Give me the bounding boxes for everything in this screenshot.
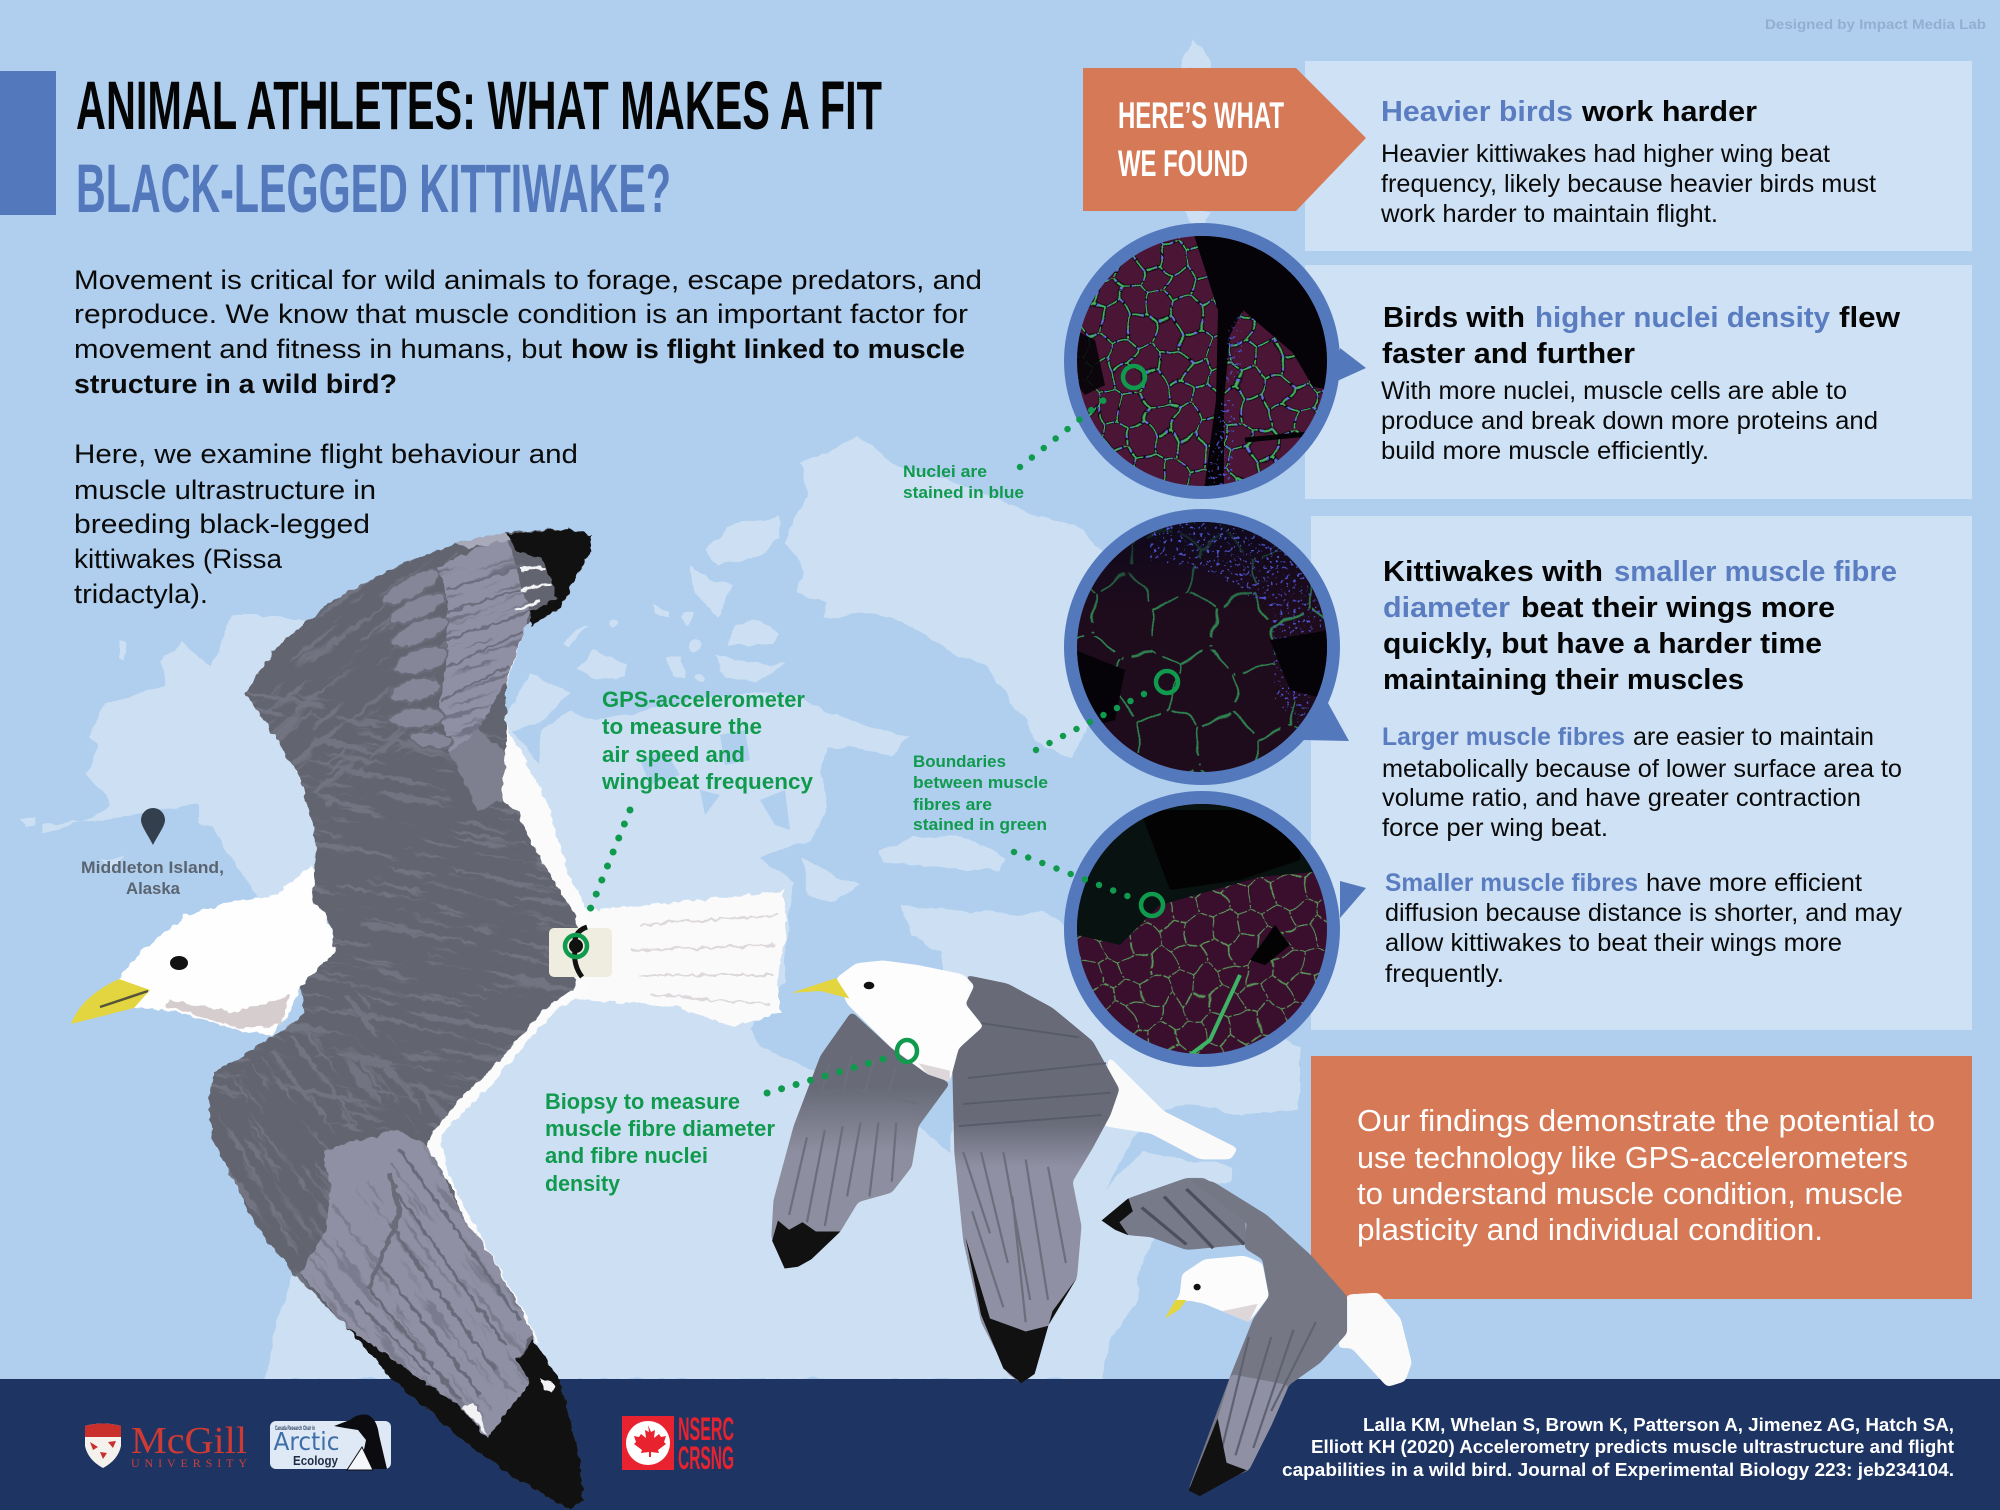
methods text: Here, we examine flight behaviour and xyxy=(74,439,578,469)
panel: conclusion: to understand muscle condition, muscle xyxy=(1357,1176,1903,1211)
logo: Arctic Ecology: Arctic xyxy=(274,1427,340,1456)
micrograph: small fibres xyxy=(1060,790,1366,1070)
logo: Arctic Ecology xyxy=(270,1415,391,1470)
title xyxy=(76,67,882,227)
intro text: reproduce. We know that muscle condition is an important factor for xyxy=(74,299,968,329)
panel: heavier birds: Heavier birds xyxy=(1381,96,1573,128)
intro text: Movement is critical for wild animals to forage, escape predators, and xyxy=(74,265,982,295)
header accent bar xyxy=(0,71,56,215)
label: GPS-accelerometer xyxy=(601,687,814,794)
micrograph: high nuclei density muscle xyxy=(1060,220,1366,510)
location marker: Middleton Island: Alaska xyxy=(126,879,181,898)
panel: muscle fibre diameter: allow kittiwakes to beat their wings more xyxy=(1385,929,1842,957)
panel: nuclei density xyxy=(1305,265,1972,499)
panel: heavier birds: work harder to maintain flight. xyxy=(1380,200,1718,228)
panel: conclusion xyxy=(1311,1056,1972,1299)
panel: heavier birds: Heavier kittiwakes had higher wing beat xyxy=(1381,140,1830,168)
panel: muscle fibre diameter: smaller muscle fibre xyxy=(1614,556,1897,588)
intro text: structure in a wild bird? xyxy=(74,369,397,399)
text: CRSNG xyxy=(678,1440,734,1476)
title: ANIMAL ATHLETES: WHAT MAKES A FIT xyxy=(76,67,882,144)
panel: muscle fibre diameter: metabolically because of lower surface area to xyxy=(1382,755,1902,783)
panel: muscle fibre diameter xyxy=(1311,516,1972,1030)
title: BLACK-LEGGED KITTIWAKE? xyxy=(76,150,671,227)
label: nuclei: Nuclei are xyxy=(903,462,987,481)
label: biopsy: density xyxy=(545,1171,621,1196)
footer band xyxy=(0,1379,2000,1510)
illustration: large kittiwake from below xyxy=(71,465,786,1510)
label: GPS-accelerometer: air speed and xyxy=(602,742,745,767)
panel: heavier birds xyxy=(1305,61,1972,251)
citation: Lalla KM, Whelan S, Brown K, Patterson A, Jimenez AG, Hatch SA, xyxy=(1363,1415,1954,1435)
intro text xyxy=(74,265,982,399)
methods text: tridactyla). xyxy=(74,579,208,609)
callout: biopsy marker xyxy=(767,1040,917,1093)
panel: muscle fibre diameter: diffusion because distance is shorter, and may xyxy=(1385,899,1903,927)
label: biopsy xyxy=(545,1089,775,1196)
logo: McGill University xyxy=(85,1420,247,1470)
panel: muscle fibre diameter: frequently. xyxy=(1385,960,1504,988)
label: GPS-accelerometer: GPS-accelerometer xyxy=(602,687,805,712)
callout: fibre boundary dots lower xyxy=(1014,852,1130,897)
methods text: kittiwakes (Rissa xyxy=(74,544,283,574)
panel: nuclei density: Birds with xyxy=(1383,302,1525,334)
intro text: movement and fitness in humans, but xyxy=(74,334,563,364)
panel: nuclei density: build more muscle efficiently. xyxy=(1381,437,1709,465)
text: NSERC xyxy=(678,1411,734,1447)
panel: nuclei density: faster and further xyxy=(1382,338,1635,370)
panel: muscle fibre diameter: beat their wings more xyxy=(1521,592,1835,624)
callout: fibre boundary dots upper xyxy=(1036,694,1144,750)
citation: Elliott KH (2020) Accelerometry predicts muscle ultrastructure and flight xyxy=(1311,1437,1954,1457)
label: fibre boundaries: between muscle xyxy=(913,773,1048,792)
illustration: middle kittiwake in flight xyxy=(771,960,1238,1383)
methods text: muscle ultrastructure in xyxy=(74,475,376,505)
panel: muscle fibre diameter: Smaller muscle fibres xyxy=(1385,869,1638,897)
credit: Designed by Impact Media Lab xyxy=(1765,16,1986,32)
panel: conclusion: use technology like GPS-accelerometers xyxy=(1357,1140,1908,1175)
label: nuclei xyxy=(903,462,1024,502)
panel: muscle fibre diameter: volume ratio, and have greater contraction xyxy=(1382,784,1861,812)
label: nuclei: stained in blue xyxy=(903,483,1024,502)
citation: capabilities in a wild bird. Journal of Experimental Biology 223: jeb234104. xyxy=(1282,1460,1954,1480)
label: fibre boundaries: fibres are xyxy=(913,795,992,814)
location marker: Middleton Island: Middleton Island, xyxy=(81,858,224,877)
callout: nuclei stained dots xyxy=(1020,392,1114,467)
citation xyxy=(1282,1415,1954,1480)
logo: Arctic Ecology: Ecology xyxy=(293,1453,339,1468)
arrow banner: here's what we found: WE FOUND xyxy=(1118,143,1248,184)
methods text: breeding black-legged xyxy=(74,509,370,539)
label: GPS-accelerometer: to measure the xyxy=(602,714,762,739)
panel: nuclei density: With more nuclei, muscle cells are able to xyxy=(1381,377,1847,405)
panel: muscle fibre diameter: have more efficient xyxy=(1646,869,1862,897)
map of northern North America xyxy=(20,40,1300,1379)
logo: McGill University: UNIVERSITY xyxy=(131,1456,247,1470)
label: GPS-accelerometer: wingbeat frequency xyxy=(601,769,814,794)
panel: nuclei density: flew xyxy=(1839,302,1900,334)
panel: nuclei density: higher nuclei density xyxy=(1535,302,1830,334)
callout: GPS tag marker xyxy=(565,810,630,957)
logo: McGill University: McGill xyxy=(131,1420,247,1462)
panel: muscle fibre diameter: maintaining their muscles xyxy=(1383,664,1744,696)
label: biopsy: muscle fibre diameter xyxy=(545,1116,775,1141)
label: biopsy: Biopsy to measure xyxy=(545,1089,740,1114)
panel: muscle fibre diameter: Kittiwakes with xyxy=(1383,556,1603,588)
logo: NSERC CRSNG xyxy=(622,1411,734,1476)
micrograph: sparse large fibres xyxy=(1060,505,1350,795)
location marker: Middleton Island xyxy=(81,808,224,898)
intro text: how is flight linked to muscle xyxy=(571,334,965,364)
illustration: lower kittiwake banking xyxy=(1102,1178,1412,1496)
label: fibre boundaries xyxy=(913,752,1048,834)
panel: muscle fibre diameter: Larger muscle fibres xyxy=(1382,723,1625,751)
arrow banner: here's what we found: HERE’S WHAT xyxy=(1118,95,1284,136)
panel: heavier birds: work harder xyxy=(1581,96,1757,128)
panel: muscle fibre diameter: force per wing beat. xyxy=(1382,814,1608,842)
panel: nuclei density: produce and break down more proteins and xyxy=(1381,407,1878,435)
panel: conclusion: Our findings demonstrate the potential to xyxy=(1357,1103,1935,1138)
panel: conclusion: plasticity and individual condition. xyxy=(1357,1212,1823,1247)
panel: muscle fibre diameter: are easier to maintain xyxy=(1633,723,1874,751)
panel: heavier birds: frequency, likely because heavier birds must xyxy=(1381,170,1876,198)
label: biopsy: and fibre nuclei xyxy=(545,1143,708,1168)
arrow banner: here's what we found xyxy=(1083,68,1366,211)
label: fibre boundaries: stained in green xyxy=(913,815,1047,834)
label: fibre boundaries: Boundaries xyxy=(913,752,1006,771)
panel: muscle fibre diameter: diameter xyxy=(1383,592,1510,624)
methods text xyxy=(74,439,578,609)
Arctic inlets xyxy=(640,730,874,830)
logo: Arctic Ecology: Canada Research Chair in xyxy=(275,1426,315,1432)
panel: muscle fibre diameter: quickly, but have a harder time xyxy=(1383,628,1822,660)
